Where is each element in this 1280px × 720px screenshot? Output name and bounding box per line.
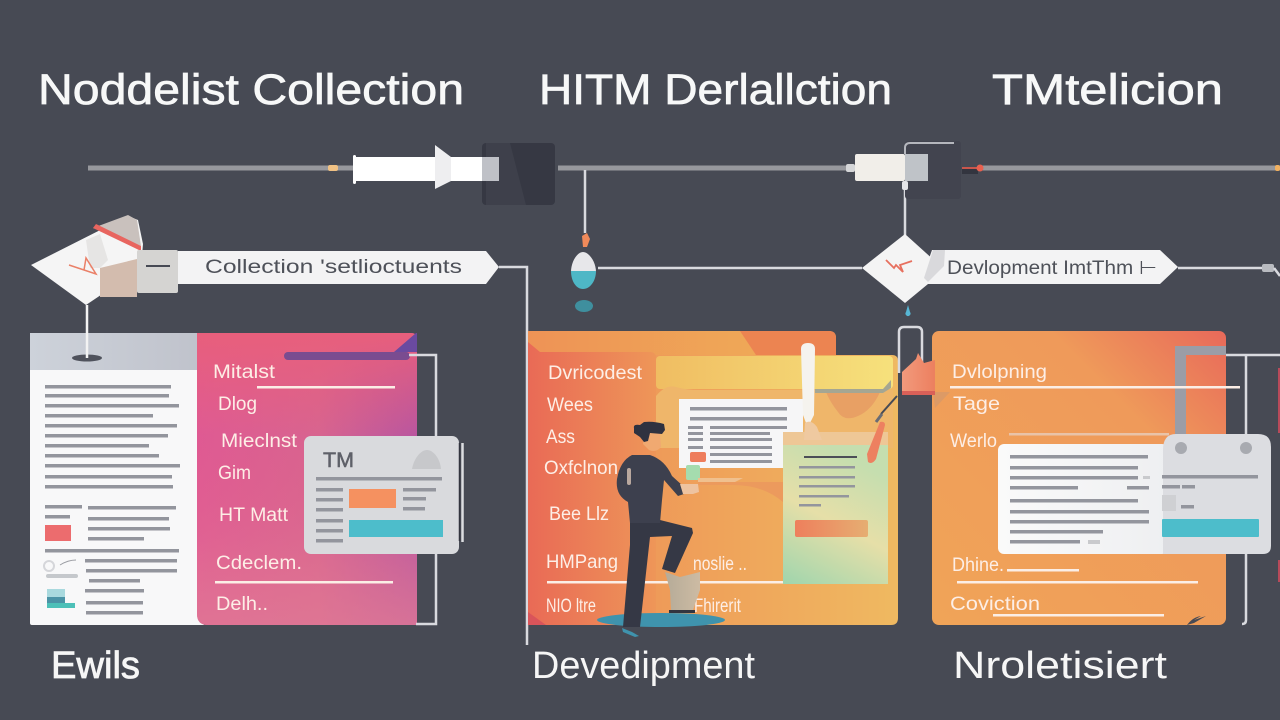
panel labels: Bee Llz	[549, 504, 609, 525]
connector: bulb to diamond	[598, 267, 862, 269]
white content card	[998, 444, 1168, 554]
icon: water drop bulb	[571, 233, 596, 312]
panel labels	[950, 362, 1047, 615]
illustration: person standing	[597, 422, 743, 637]
banner: Development ImtThm: Devlopment ImtThm ⊢	[947, 258, 1157, 279]
panel labels: Fhirerit	[694, 596, 742, 617]
paint brush and tool	[801, 343, 897, 463]
red bottom-left corner	[528, 612, 546, 625]
red left column	[528, 342, 656, 625]
pink panel labels: Mieclnst	[221, 431, 298, 452]
panel labels: NIO ltre	[546, 596, 596, 617]
document text lines	[45, 385, 180, 614]
bracket connector	[409, 355, 436, 624]
pink panel labels: Dlog	[218, 394, 257, 415]
connector: right bracket	[1226, 355, 1280, 624]
divider line	[547, 581, 783, 584]
pink panel labels: HT Matt	[219, 505, 289, 526]
pink panel labels: Delh..	[216, 594, 268, 615]
connector: banner to panel two	[499, 267, 527, 645]
green content card	[783, 445, 888, 584]
orange wave under document	[698, 482, 783, 502]
grey form tab	[1162, 434, 1271, 554]
banner: Collection setlocuents	[178, 251, 499, 284]
panel labels: Werlo	[950, 431, 997, 452]
panel: Noddelist document	[30, 333, 462, 625]
panel labels: Ass	[546, 427, 575, 448]
panel: Developing document	[932, 331, 1280, 625]
banner: Collection setlocuents: Collection 'setlioctuents	[205, 257, 462, 278]
white document sheet	[30, 333, 205, 625]
heading: Noddelist Collection: Noddelist Collection	[38, 66, 464, 114]
panel labels: Oxfclnon	[544, 458, 618, 479]
corner leaf mark	[1187, 616, 1206, 625]
wavy band behind documents	[656, 386, 893, 448]
orange panel body	[932, 331, 1226, 625]
label: Devedipment: Devedipment	[532, 645, 755, 687]
floating TM card	[304, 436, 462, 554]
panel labels: Dvlolpning	[952, 362, 1047, 383]
floating TM card: TM	[323, 449, 354, 472]
label underlines	[950, 386, 1240, 616]
heading: TMtelicion: TMtelicion	[992, 66, 1223, 114]
teal stack thumbnail	[47, 589, 75, 608]
red image block	[45, 525, 71, 541]
white document card	[679, 399, 803, 468]
label: Ewils: Ewils	[51, 645, 140, 687]
icon: plug connector	[846, 141, 984, 199]
pink panel labels: Gim	[218, 463, 251, 484]
panel labels: Tage	[953, 394, 1000, 415]
pink panel labels	[213, 362, 302, 615]
panel labels	[544, 363, 747, 617]
red edge slivers	[1278, 368, 1280, 582]
panel labels: Coviction	[950, 594, 1040, 615]
grey bracket	[1175, 346, 1226, 435]
orange base panel	[528, 331, 898, 625]
top connector pipeline	[88, 165, 1280, 235]
connector: right banner to edge	[1178, 264, 1280, 276]
icon: orange folder clip	[902, 353, 950, 408]
panel labels: Dhine.	[952, 555, 1004, 576]
small grey chart thumbnail	[44, 560, 78, 578]
yellow header strip	[656, 356, 893, 389]
banner: Development ImtThm	[920, 250, 1178, 284]
pink panel labels: Cdeclem.	[216, 553, 302, 574]
pink panel labels: Mitalst	[213, 362, 276, 383]
icon: right diamond marker	[862, 234, 945, 316]
panel labels: Wees	[547, 395, 593, 416]
connector: left marker to panel one	[86, 305, 88, 334]
pink side panel	[197, 333, 417, 625]
peach wave shape	[826, 392, 880, 418]
connector: panel link loop	[899, 327, 922, 373]
panel labels: noslie ..	[693, 554, 747, 575]
icon: syringe connector	[353, 143, 555, 205]
heading: HITM Derlallction: HITM Derlallction	[539, 66, 892, 114]
peach strip above green card	[783, 432, 888, 446]
panel labels: Dvricodest	[548, 363, 643, 384]
panel labels: HMPang	[546, 552, 618, 573]
panel: Development document	[528, 331, 898, 637]
label: Nroletisiert: Nroletisiert	[953, 645, 1168, 687]
icon: left diamond marker	[31, 215, 178, 305]
